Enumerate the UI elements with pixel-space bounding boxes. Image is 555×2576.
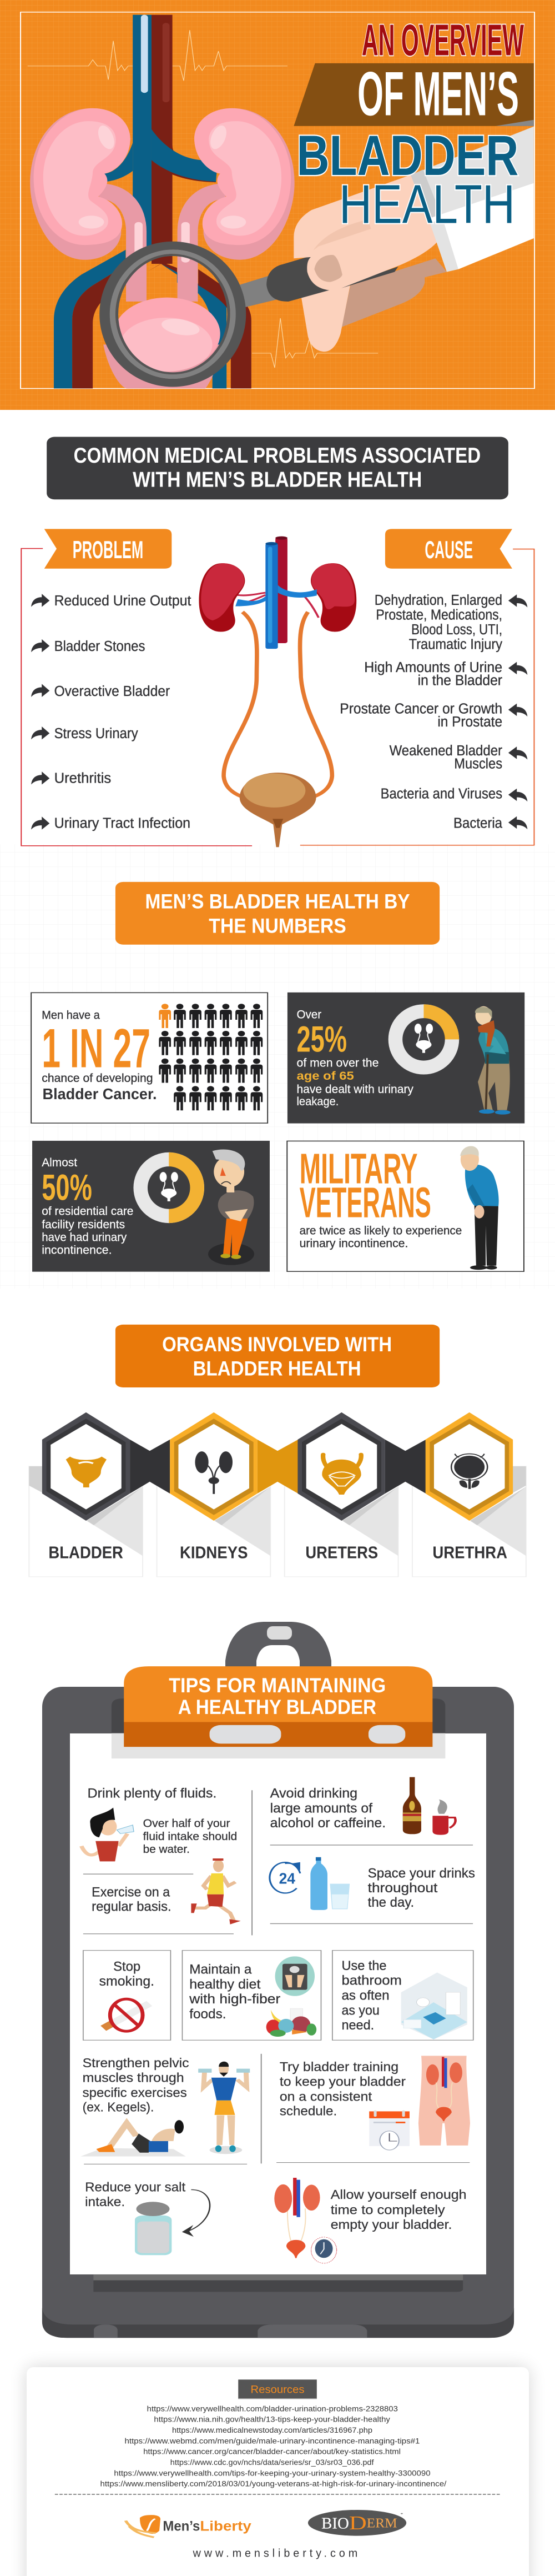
tip: reduce salt: intake. — [85, 2195, 125, 2209]
tip: pelvic exercises: muscles through — [83, 2071, 184, 2085]
banner: cause — [385, 529, 512, 569]
stat card: 25 percent — [287, 993, 524, 1124]
list: problems: Overactive Bladder — [54, 684, 170, 699]
illustration: man with stomach ache — [208, 1150, 254, 1265]
section heading — [115, 1325, 440, 1387]
stat card: 25 percent: age of 65 — [296, 1070, 354, 1082]
logo: Men's Liberty: Men’s — [163, 2518, 200, 2534]
list: causes: Prostate, Medications, — [376, 608, 502, 623]
logo: BioDerm: ERM — [367, 2515, 397, 2531]
tip: avoid alcohol: large amounts of — [270, 1801, 373, 1816]
tip: drink fluids: Over half of your — [143, 1817, 230, 1830]
stat card: 50 percent: of residential care — [42, 1205, 133, 1218]
list: causes: Blood Loss, UTI, — [411, 622, 502, 638]
tip: use the bathroom: as often — [341, 1988, 390, 2003]
illustration: torso with urinary system — [418, 2056, 470, 2146]
section heading — [47, 437, 508, 499]
stat card: 50 percent: Almost — [42, 1156, 77, 1169]
stat card: 50 percent: have had urinary — [42, 1231, 127, 1244]
stat card: 1 in 27 — [31, 993, 268, 1123]
section: by the numbers — [31, 882, 524, 1272]
resource links: https://www.medicalnewstoday.com/articles/316967.php — [172, 2426, 372, 2434]
list: causes: in the Bladder — [418, 673, 502, 689]
stat card: 50 percent: facility residents — [42, 1218, 125, 1231]
organ: ureters: URETERS — [305, 1543, 378, 1562]
tip: avoid alcohol: Avoid drinking — [270, 1786, 357, 1801]
tip: healthy diet: foods. — [189, 2007, 226, 2022]
tip: avoid alcohol: alcohol or caffeine. — [270, 1816, 386, 1831]
stat card: 50 percent: 50% — [42, 1167, 92, 1208]
icon: clock, bottle and glass — [270, 1857, 350, 1910]
card shadows — [29, 1466, 526, 1577]
banner: problem — [44, 529, 171, 569]
tip: use the bathroom: need. — [341, 2018, 374, 2033]
tip: empty bladder: time to completely — [331, 2203, 445, 2217]
illustration: sit-up — [80, 2120, 186, 2156]
clip shadow — [112, 1698, 445, 1733]
tip: space drinks: throughout — [368, 1881, 438, 1896]
illustration: urinary system — [199, 537, 356, 847]
hero banner — [0, 0, 555, 410]
donut chart: 50 percent — [133, 1152, 204, 1223]
resources label — [238, 2379, 317, 2399]
organ: ureters — [297, 1412, 385, 1562]
list: causes — [340, 593, 527, 831]
stat card: 25 percent: Over — [296, 1008, 321, 1021]
clipboard body — [42, 1687, 514, 2338]
logo: Men's Liberty: Liberty — [200, 2518, 251, 2534]
section heading: MEN’S BLADDER HEALTH BY — [145, 890, 410, 913]
logo: BioDerm — [308, 2510, 406, 2536]
tip: reduce salt: Reduce your salt — [85, 2180, 186, 2194]
organ: bladder — [42, 1412, 130, 1562]
panel: resources footer — [27, 2367, 529, 2576]
organ: kidneys: KIDNEYS — [180, 1543, 248, 1562]
stat card: 1 in 27: Men have a — [42, 1009, 100, 1022]
tip: healthy diet: Maintain a — [189, 1962, 252, 1977]
tip: empty bladder: empty your bladder. — [331, 2218, 452, 2232]
tip: exercise: regular basis. — [92, 1900, 171, 1914]
section heading: BLADDER HEALTH — [193, 1357, 361, 1380]
banner: cause: CAUSE — [425, 535, 473, 564]
icon: scale and food — [266, 1956, 316, 2037]
clipboard paper — [70, 1733, 486, 2274]
list: causes: Bacteria and Viruses — [381, 786, 502, 802]
list: causes: in Prostate — [437, 714, 502, 730]
stat card: 50 percent — [32, 1141, 270, 1272]
stat card: military veterans: urinary incontinence. — [300, 1237, 408, 1250]
tip: use the bathroom: as you — [341, 2003, 380, 2018]
tip: bladder training — [280, 2056, 470, 2150]
organ: kidneys — [170, 1412, 258, 1562]
list: problems: Bladder Stones — [54, 639, 145, 654]
logo: BioDerm: BIO — [321, 2515, 349, 2532]
illustration: man holding groin — [460, 1146, 499, 1270]
icon: isometric bathroom — [401, 1972, 467, 2039]
illustration: man with dumbbells — [198, 2062, 250, 2154]
resources label: Resources — [251, 2383, 305, 2395]
tip: reduce salt — [85, 2180, 210, 2255]
tip: bladder training: on a consistent — [280, 2089, 372, 2104]
icon: bottle and mug — [403, 1777, 456, 1835]
title banner — [294, 63, 534, 126]
icon: calendar — [369, 2111, 410, 2150]
heartbeat lines — [28, 30, 378, 368]
stat card: 50 percent: incontinence. — [42, 1244, 112, 1257]
tip: drink fluids: be water. — [143, 1843, 190, 1856]
resource links — [100, 2404, 446, 2488]
icon: clock, bottle and glass: 24 — [279, 1870, 295, 1887]
tip: use the bathroom — [332, 1951, 473, 2040]
tip: empty bladder: Allow yourself enough — [331, 2188, 467, 2202]
stat card: military veterans: are twice as likely to experience — [300, 1224, 462, 1237]
tip: space drinks — [270, 1857, 475, 1910]
tip: bladder training: Try bladder training — [280, 2060, 398, 2074]
illustration: old man with cane — [475, 1006, 511, 1115]
grid background — [0, 844, 555, 1289]
tip: stop smoking: smoking. — [99, 1974, 154, 1989]
logo: Men's Liberty — [125, 2515, 251, 2537]
list: causes: Muscles — [454, 756, 502, 772]
list: causes: High Amounts of Urine — [364, 660, 502, 675]
stat card: military veterans: MILITARY — [300, 1145, 418, 1192]
stat card: 25 percent: leakage. — [296, 1095, 339, 1108]
tip: pelvic exercises: specific exercises — [83, 2086, 187, 2100]
section heading: WITH MEN’S BLADDER HEALTH — [133, 468, 422, 492]
list: problems — [31, 593, 191, 831]
website url: www.mensliberty.com — [193, 2547, 357, 2559]
tip: stop smoking — [83, 1951, 170, 2040]
tip: pelvic exercises: Strengthen pelvic — [83, 2056, 189, 2071]
tab heading: TIPS FOR MAINTAINING — [169, 1673, 386, 1697]
tip: stop smoking: Stop — [113, 1959, 140, 1974]
arrow — [182, 2189, 210, 2237]
tip: drink fluids: fluid intake should — [143, 1830, 237, 1843]
list: causes: Bacteria — [453, 816, 503, 831]
tip: space drinks: the day. — [368, 1895, 414, 1910]
dividers — [84, 2054, 470, 2164]
illustration: hand with magnifying glass — [105, 127, 534, 383]
tip: drink fluids: Drink plenty of fluids. — [88, 1786, 216, 1801]
donut chart: 25 percent — [389, 1004, 459, 1075]
pictogram: people — [159, 1004, 263, 1110]
tip: healthy diet — [182, 1951, 321, 2040]
section heading: ORGANS INVOLVED WITH — [162, 1333, 392, 1356]
section heading — [115, 882, 440, 945]
section heading: THE NUMBERS — [209, 914, 346, 938]
stat card: 25 percent: have dealt with urinary — [296, 1083, 413, 1096]
stat card: 25 percent: of men over the — [296, 1056, 379, 1070]
section: organs — [29, 1325, 526, 1577]
icon: kidneys, bladder and clock — [274, 2178, 337, 2263]
tip: pelvic exercises: (ex. Kegels). — [83, 2100, 154, 2114]
title — [296, 15, 524, 235]
banner: problem: PROBLEM — [73, 535, 143, 564]
logo: BioDerm: D — [349, 2512, 367, 2534]
tip: space drinks: Space your drinks — [368, 1866, 475, 1881]
frame lines — [21, 549, 252, 846]
illustration: kidneys and vessels — [30, 15, 295, 388]
tip: avoid alcohol — [270, 1777, 456, 1835]
list: causes: Weakened Bladder — [390, 743, 502, 759]
illustration: boy drinking — [82, 1808, 134, 1861]
tip: bladder training: schedule. — [280, 2104, 337, 2118]
stat card: 1 in 27: 1 IN 27 — [42, 1018, 150, 1079]
illustration: runner — [191, 1858, 241, 1925]
dividers — [83, 1790, 473, 1935]
stat card: 25 percent: 25% — [296, 1019, 347, 1060]
tip: exercise: Exercise on a — [92, 1885, 170, 1900]
stat card: military veterans — [287, 1141, 524, 1271]
list: problems: Urinary Tract Infection — [54, 816, 190, 831]
clipboard clip — [225, 1622, 331, 1672]
organ: urethra — [426, 1412, 513, 1562]
tip: pelvic exercises — [80, 2056, 250, 2156]
tip: healthy diet: with high-fiber — [189, 1992, 280, 2007]
panel: clipboard — [42, 1622, 514, 2338]
tip: drink fluids — [82, 1786, 237, 1861]
tip: bladder training: to keep your bladder — [280, 2075, 406, 2089]
tip: use the bathroom: bathroom — [341, 1973, 402, 1988]
tip: empty bladder — [274, 2178, 467, 2263]
list: causes: Prostate Cancer or Growth — [340, 701, 502, 717]
resource links: https://www.cdc.gov/nchs/data/series/sr_03/sr03_036.pdf — [170, 2458, 374, 2467]
tip: exercise — [92, 1858, 241, 1925]
tip: healthy diet: healthy diet — [189, 1977, 261, 1992]
organ: bladder: BLADDER — [48, 1543, 123, 1562]
stat card: 1 in 27: chance of developing — [42, 1072, 153, 1085]
list: problems: Urethritis — [54, 770, 111, 786]
list: problems: Reduced Urine Output — [54, 593, 191, 609]
icon: salt shaker — [135, 2202, 171, 2255]
stat card: 1 in 27: Bladder Cancer. — [43, 1085, 157, 1102]
icon: no smoking — [103, 1999, 149, 2031]
connectors — [130, 1440, 426, 1494]
tab heading — [124, 1666, 432, 1747]
tab heading: A HEALTHY BLADDER — [178, 1695, 376, 1718]
list: causes: Traumatic Injury — [409, 637, 502, 653]
section: common medical problems — [21, 437, 534, 847]
list: causes: Dehydration, Enlarged — [375, 593, 502, 608]
tip: use the bathroom: Use the — [341, 1958, 386, 1973]
list: problems: Stress Urinary — [54, 726, 138, 741]
